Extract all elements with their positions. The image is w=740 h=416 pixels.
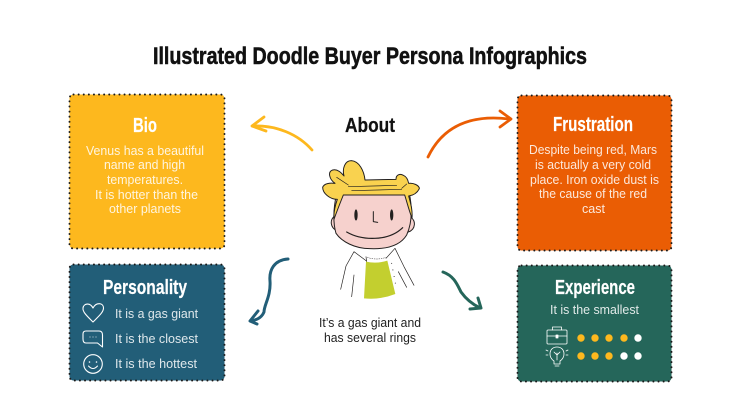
caption (319, 316, 421, 345)
icon: speech bubble (83, 331, 102, 347)
smile (347, 228, 403, 238)
heading: bio: Bio (133, 115, 157, 137)
heading: frustration: Frustration (553, 114, 633, 136)
panel: bio (70, 94, 224, 248)
text block: bio description (86, 144, 204, 216)
panel: frustration (518, 96, 672, 250)
arrow: to experience (443, 272, 481, 309)
text block: frustration description: cast (582, 202, 606, 216)
arrow: to frustration (428, 111, 511, 157)
panel: personality (70, 264, 224, 380)
caption: has several rings (324, 331, 416, 345)
rating dots: bulb row (577, 352, 642, 360)
text block: frustration description: Despite being red, Mars (529, 143, 657, 157)
body and coat (341, 248, 414, 298)
text: smallest: It is the smallest (550, 303, 640, 317)
nose (373, 212, 378, 222)
text block: frustration description: place. Iron oxide dust is (530, 173, 659, 187)
text: hottest: It is the hottest (115, 357, 198, 371)
text block: bio description: name and high (104, 158, 185, 172)
heading: personality: Personality (103, 277, 188, 299)
text block: frustration description (529, 143, 659, 216)
arrow: to bio (252, 117, 312, 150)
icon: light bulb (546, 347, 568, 366)
icon: smiley (84, 355, 102, 373)
panel: experience (518, 266, 672, 382)
text block: frustration description: the cause of the red (539, 187, 647, 201)
caption: It’s a gas giant and (319, 316, 421, 330)
text block: frustration description: is actually a very cold (535, 158, 651, 172)
text block: bio description: temperatures. (107, 173, 183, 187)
text: gas giant: It is a gas giant (115, 307, 199, 321)
text block: bio description: Venus has a beautiful (86, 144, 204, 158)
text: closest: It is the closest (115, 332, 199, 346)
rating dots: briefcase row (577, 334, 642, 342)
face (334, 193, 411, 249)
character illustration (323, 161, 419, 299)
green vest (364, 261, 395, 299)
hair (323, 161, 419, 219)
icon: heart (83, 304, 104, 322)
heading: experience: Experience (555, 277, 635, 299)
ears (331, 217, 414, 232)
icon: briefcase (547, 327, 567, 344)
eyes (354, 209, 393, 221)
text block: bio description: It is hotter than the (95, 188, 198, 202)
title: Illustrated Doodle Buyer Persona Infographics (153, 43, 587, 70)
heading: about: About (345, 115, 395, 137)
text block: bio description: other planets (109, 202, 181, 216)
arrow: to personality (250, 259, 288, 324)
